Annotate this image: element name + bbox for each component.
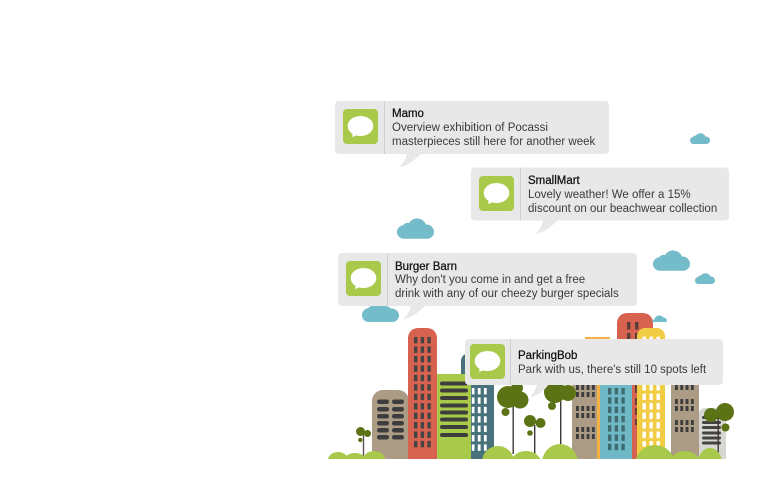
trees bbox=[356, 381, 734, 456]
text: Burger Barn: Burger Barn bbox=[395, 261, 457, 273]
icon: message bbox=[479, 176, 514, 211]
building: teal bbox=[461, 353, 494, 459]
bush: left bbox=[328, 451, 386, 459]
bush: right bbox=[636, 445, 722, 459]
icon: cloud right large bbox=[653, 250, 690, 271]
clouds bbox=[362, 133, 715, 322]
text: Mamo message: Overview exhibition of Pocassi bbox=[392, 122, 548, 134]
text: SmallMart: SmallMart bbox=[528, 175, 581, 187]
text: Mamo: Mamo bbox=[392, 108, 424, 120]
icon: cloud behind burger barn bubble bbox=[362, 306, 399, 322]
tree: centre large bbox=[497, 382, 528, 454]
bubble: SmallMart: discount on our beachwear collection bbox=[528, 203, 717, 215]
icon: message bbox=[346, 261, 381, 296]
bush: centre bbox=[482, 444, 578, 459]
bubble: Burger Barn: drink with any of our cheezy burger specials bbox=[395, 288, 619, 300]
tree: centre small bbox=[524, 415, 546, 455]
text: Burger Barn message: Why don't you come in and get a free bbox=[395, 274, 585, 286]
bubble: SmallMart bbox=[471, 168, 729, 234]
icon: message bbox=[470, 344, 505, 379]
text: ParkingBob: ParkingBob bbox=[518, 350, 577, 362]
text: ParkingBob message: Park with us, there's still 10 spots left bbox=[518, 364, 707, 376]
building: red tall bbox=[408, 328, 437, 459]
icon: cloud right small bbox=[695, 273, 715, 284]
building: orange bbox=[585, 337, 610, 459]
bubble: Mamo: masterpieces still here for another week bbox=[392, 136, 596, 148]
bushes bbox=[328, 444, 722, 459]
icon: small cloud behind tower bbox=[652, 315, 667, 322]
building: beige centre right bbox=[572, 370, 597, 459]
building: yellow bbox=[637, 328, 665, 459]
icon: cloud right top bbox=[690, 133, 710, 144]
bubble: Burger Barn bbox=[338, 253, 637, 319]
bubble: Mamo bbox=[335, 101, 609, 167]
building: beige left bbox=[372, 390, 409, 459]
building: green bbox=[437, 374, 471, 459]
tree: centre right bbox=[544, 381, 576, 448]
city skyline bbox=[372, 313, 726, 459]
tree: right bbox=[704, 403, 734, 456]
building: blue bbox=[600, 370, 632, 459]
building: beige right bbox=[671, 370, 699, 459]
text: SmallMart message: Lovely weather! We offer a 15% bbox=[528, 189, 691, 201]
icon: cloud middle bbox=[397, 218, 434, 239]
building: grey right bbox=[699, 408, 726, 459]
tree: left small bbox=[356, 427, 371, 456]
building: red right bbox=[617, 313, 653, 459]
bubble: ParkingBob bbox=[465, 339, 723, 397]
icon: message bbox=[343, 109, 378, 144]
